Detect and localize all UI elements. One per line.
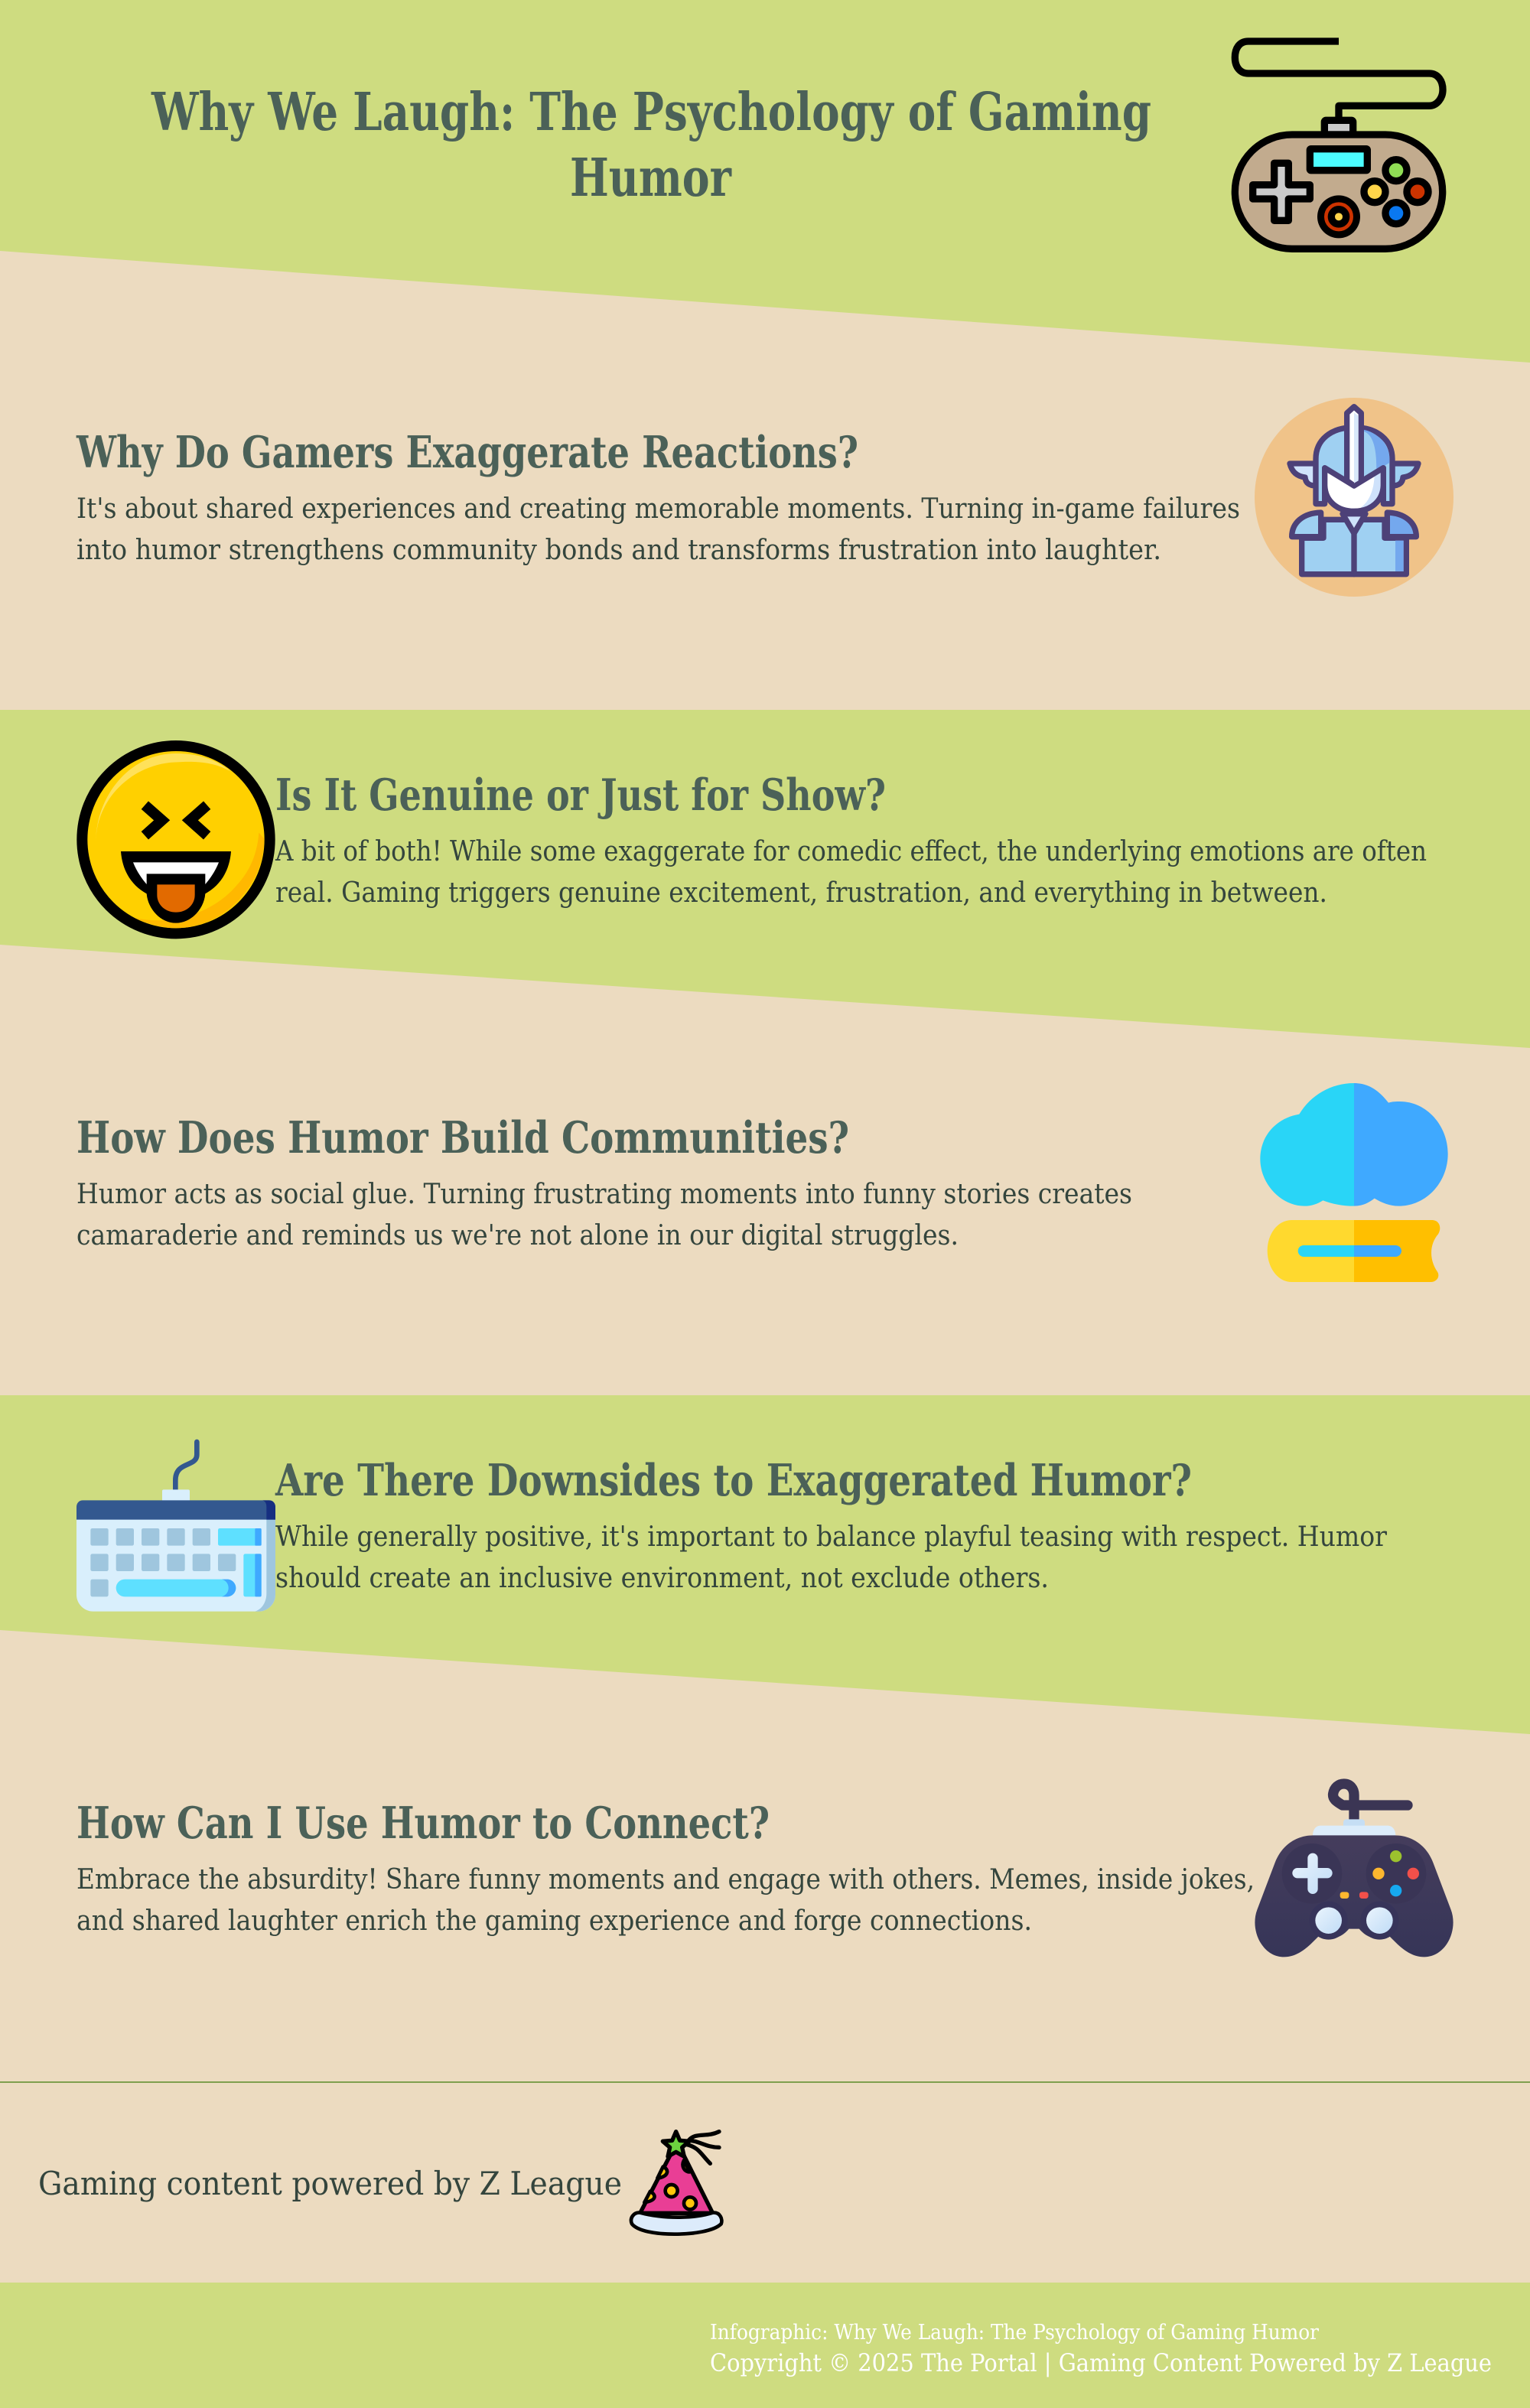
icon: party hat — [631, 2132, 721, 2234]
icon: cloud and book — [1260, 1083, 1448, 1282]
title: Humor — [570, 148, 732, 209]
body text 5 — [76, 1864, 1255, 1937]
section 4 band — [0, 1395, 1530, 1734]
body text 3: camaraderie and reminds us we're not alone in our digital struggles. — [76, 1220, 959, 1251]
icon: dark gamepad — [1255, 1784, 1454, 1957]
footer band — [0, 2283, 1530, 2408]
section 2 band — [0, 710, 1530, 1048]
body text 2: A bit of both! While some exaggerate for comedic effect, the underlying emotions are often — [275, 836, 1427, 867]
footer rule — [0, 2081, 1530, 2083]
title: Why We Laugh: The Psychology of Gaming — [151, 82, 1151, 143]
section 5 — [76, 1798, 1255, 1937]
footer text — [710, 2321, 1492, 2377]
body text 2 — [275, 836, 1427, 909]
body text 4 — [275, 1521, 1388, 1594]
footer text: Infographic: Why We Laugh: The Psychology of Gaming Humor — [710, 2321, 1319, 2345]
icon: laughing face with tongue — [82, 746, 270, 933]
body text 4: should create an inclusive environment, not exclude others. — [275, 1563, 1049, 1594]
heading: why do gamers exaggerate: Why Do Gamers Exaggerate Reactions? — [76, 427, 858, 478]
heading: build communities: How Does Humor Build Communities? — [76, 1112, 849, 1163]
icon: keyboard — [76, 1442, 275, 1612]
body text 5: Embrace the absurdity! Share funny moments and engage with others. Memes, inside jokes, — [76, 1864, 1255, 1895]
section 3 — [76, 1112, 1132, 1251]
body text 2: real. Gaming triggers genuine excitement, frustration, and everything in between. — [275, 877, 1327, 909]
body text 4: While generally positive, it's important to balance playful teasing with respect. Humor — [275, 1521, 1388, 1553]
icon: wired game controller — [1235, 41, 1443, 249]
body text 1: It's about shared experiences and creating memorable moments. Turning in-game failures — [76, 493, 1240, 525]
section 2 — [275, 770, 1427, 909]
icon: armored knight — [1255, 398, 1454, 597]
body text 3: Humor acts as social glue. Turning frustrating moments into funny stories creates — [76, 1179, 1132, 1210]
sponsor line: Gaming content powered by Z League — [38, 2165, 622, 2202]
body text 5: and shared laughter enrich the gaming experience and forge connections. — [76, 1905, 1032, 1937]
body text 3 — [76, 1179, 1132, 1251]
title — [151, 82, 1151, 209]
heading: connect: How Can I Use Humor to Connect? — [76, 1798, 770, 1849]
section 1 — [76, 427, 1240, 566]
heading: genuine or show: Is It Genuine or Just for Show? — [275, 770, 886, 821]
body text 1 — [76, 493, 1240, 566]
section 4 — [275, 1455, 1388, 1594]
header band — [0, 0, 1530, 363]
heading: downsides: Are There Downsides to Exaggerated Humor? — [275, 1455, 1192, 1506]
body text 1: into humor strengthens community bonds and transforms frustration into laughter. — [76, 535, 1161, 566]
